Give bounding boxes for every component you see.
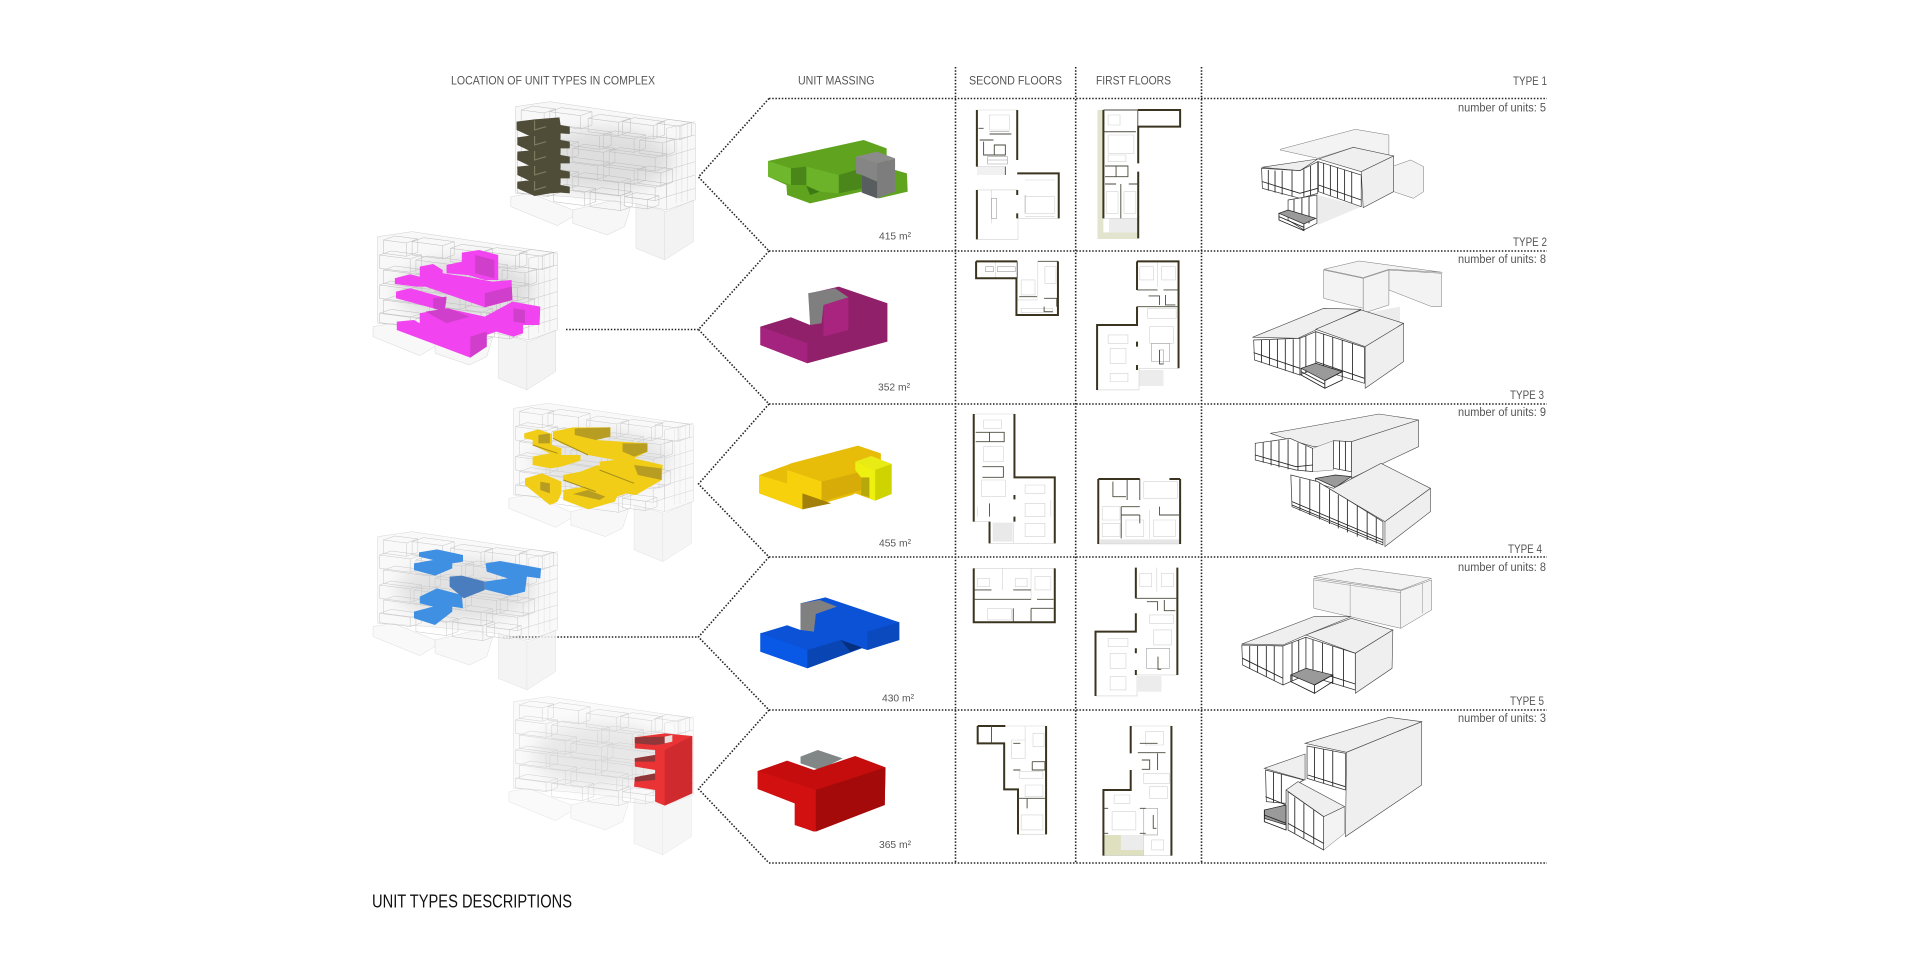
3D view: type 1 xyxy=(1262,129,1424,231)
type 5 units: number of units: 3 xyxy=(1458,713,1546,725)
connector: type 1 xyxy=(698,98,769,251)
massing: type 3 yellow xyxy=(759,446,892,509)
massing: type 2 magenta xyxy=(760,287,887,363)
area label: 365 m2: 365 m² xyxy=(879,839,911,851)
type 3 units: number of units: 9 xyxy=(1458,407,1546,419)
floor plan: type 3 second floor xyxy=(974,414,1055,543)
3D view: type 2 xyxy=(1252,261,1442,388)
complex location: type 4 xyxy=(373,532,558,690)
column heading: location of unit types: LOCATION OF UNIT TYPES IN COMPLEX xyxy=(451,76,655,88)
title: UNIT TYPES DESCRIPTIONS xyxy=(372,892,572,912)
floor plan: type 3 first floor xyxy=(1098,479,1180,544)
area label: 415 m2: 415 m² xyxy=(879,230,911,242)
massing: type 4 blue xyxy=(760,597,899,668)
massing: type 1 green xyxy=(768,140,908,203)
complex location: type 2 xyxy=(373,232,558,390)
type 3 label: TYPE 3 xyxy=(1510,390,1544,402)
column heading: second floors: SECOND FLOORS xyxy=(969,76,1062,88)
column heading: first floors: FIRST FLOORS xyxy=(1096,76,1171,88)
type 4 units: number of units: 8 xyxy=(1458,562,1546,574)
complex location: type 5 xyxy=(509,697,693,855)
area label: 352 m2: 352 m² xyxy=(878,382,910,394)
connector: type 2 xyxy=(566,251,769,404)
type 1 units: number of units: 5 xyxy=(1458,102,1546,114)
floor plan: type 2 second floor xyxy=(976,261,1058,315)
area label: 430 m2: 430 m² xyxy=(882,692,914,704)
type 2 units: number of units: 8 xyxy=(1458,254,1546,266)
type 2 label: TYPE 2 xyxy=(1513,237,1547,249)
connector: type 3 xyxy=(698,404,769,557)
floor plan: type 1 second floor xyxy=(977,110,1059,239)
connector: type 5 xyxy=(698,710,769,863)
3D view: type 5 xyxy=(1264,717,1422,850)
column heading: unit massing: UNIT MASSING xyxy=(798,76,875,88)
massing: type 5 red xyxy=(758,750,885,832)
3D view: type 3 xyxy=(1255,414,1430,547)
type 5 label: TYPE 5 xyxy=(1510,696,1544,708)
floor plan: type 5 first floor xyxy=(1103,726,1171,856)
floor plan: type 5 second floor xyxy=(978,726,1046,834)
connector: type 4 xyxy=(503,557,769,710)
floor plan: type 2 first floor xyxy=(1097,261,1179,390)
complex location: type 1 xyxy=(511,102,695,260)
3D view: type 4 xyxy=(1242,568,1432,693)
type 4 label: TYPE 4 xyxy=(1508,544,1543,556)
floor plan: type 4 first floor xyxy=(1096,568,1177,696)
table grid xyxy=(769,67,1547,863)
complex location: type 3 xyxy=(509,403,693,562)
area label: 455 m2: 455 m² xyxy=(879,538,911,550)
floor plan: type 1 first floor xyxy=(1097,110,1180,239)
type 1 label: TYPE 1 xyxy=(1513,76,1547,88)
floor plan: type 4 second floor xyxy=(974,568,1055,622)
